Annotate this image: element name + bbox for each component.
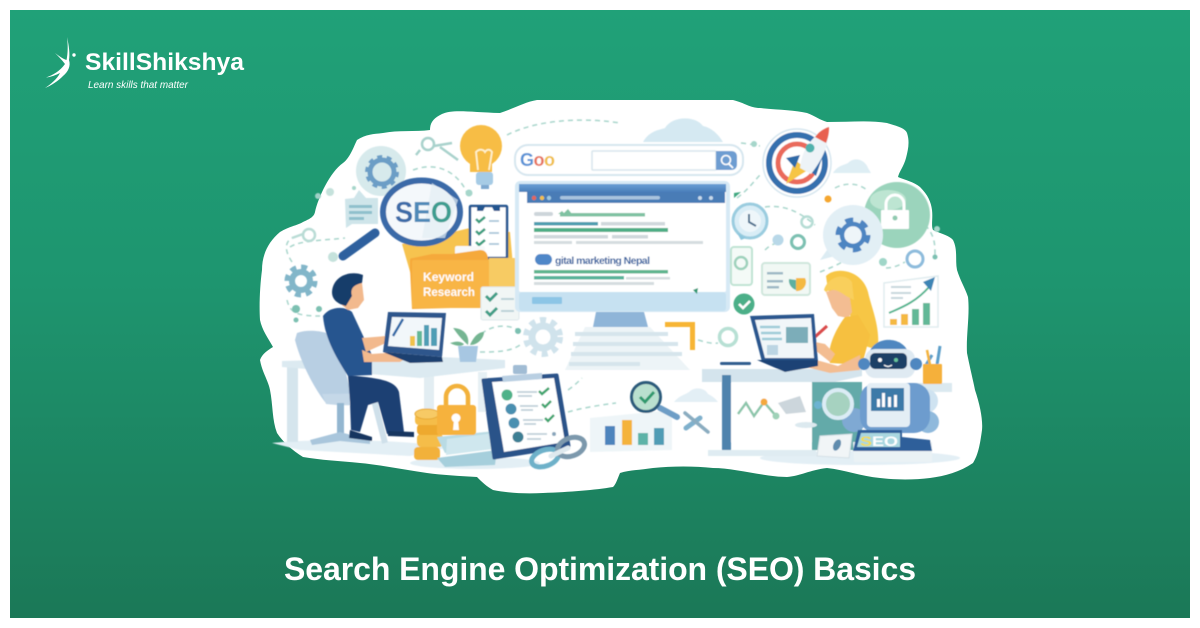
coins and padlock [410,386,540,469]
hair front [824,276,854,300]
icon: rocket target [763,127,831,197]
icon: SEO magnifying glass [343,180,460,256]
icon: link ring left [292,229,315,241]
left workstation [272,273,560,456]
icon: speech bubble [345,190,378,228]
dish [795,422,817,428]
icon: light bulb [460,125,502,189]
gear light [526,320,560,354]
bar chart card [590,410,672,452]
icon: link ring top [416,138,458,160]
desk shadow [272,440,445,456]
coins [414,409,443,460]
chain link [529,434,587,470]
icon: leaping figure [45,37,76,88]
search brand text: Goo [520,150,555,170]
white cloud illustration backdrop [260,100,982,493]
triangle marker [734,192,741,198]
icon: green check [734,294,754,314]
desk [702,369,862,456]
pencil cup [923,346,942,384]
hair [332,273,363,306]
woman [793,271,878,373]
hair back [826,271,878,350]
shirt [323,308,372,376]
search result lines [534,209,703,244]
robot body [867,383,910,427]
icon: left gear [287,267,315,295]
chair [295,331,387,445]
checklist clipboard [483,365,569,458]
right chart card [884,276,938,327]
monitor [515,181,730,370]
orange corner accent [665,322,695,350]
brand name: SkillShikshya [85,49,244,76]
desk [282,357,505,442]
ring accent [720,328,736,346]
checklist item icons [502,388,556,442]
laptop [383,312,446,363]
person [323,273,414,441]
icon: clock [733,204,767,240]
arm [362,336,390,352]
trousers [348,375,404,434]
shoes [349,430,414,441]
icon: gear bubble [820,205,883,265]
cloud right [833,159,871,173]
icon: top-left gear badge [356,146,406,196]
small cloud lower [674,388,718,402]
robot head [870,340,908,352]
pencil [805,326,827,346]
ring nodes [772,216,923,267]
tools [685,413,708,432]
search query text: gital marketing Nepal [555,255,650,267]
small gear widget [731,247,752,285]
icon: lock bubble [864,182,930,248]
result lines lower [534,270,670,285]
folder label: Keyword [423,272,474,284]
small dots [292,141,940,334]
logo [45,37,244,91]
SEO plaque: SEO [860,433,898,449]
illustration [272,118,960,470]
shelf [913,383,952,392]
face [826,285,852,318]
head [340,283,364,310]
magnifier with check [632,382,677,417]
floor shadow [760,451,960,465]
icon: check note [481,287,519,320]
plant [450,328,484,362]
arm [793,355,860,373]
dashed connector lines [286,120,935,412]
pie card [762,263,810,295]
robot [842,340,939,433]
right workstation [702,271,960,465]
robot lens [814,390,852,418]
folder label: Research [423,287,475,299]
cloud top [643,118,723,142]
paper note [817,434,852,458]
icon: folders [402,206,516,309]
folder label [423,272,475,299]
tagline: Learn skills that matter [88,79,188,91]
search bar [515,145,743,175]
icon: SEO magnifying glass: SEO [395,197,452,229]
shirt [829,315,870,365]
SEO plaque [853,430,932,462]
laptop right [720,314,818,372]
title: Search Engine Optimization (SEO) Basics [284,551,916,587]
robot arms [914,389,938,413]
padlock [437,386,476,435]
books [437,431,497,467]
search query pill [535,254,552,265]
